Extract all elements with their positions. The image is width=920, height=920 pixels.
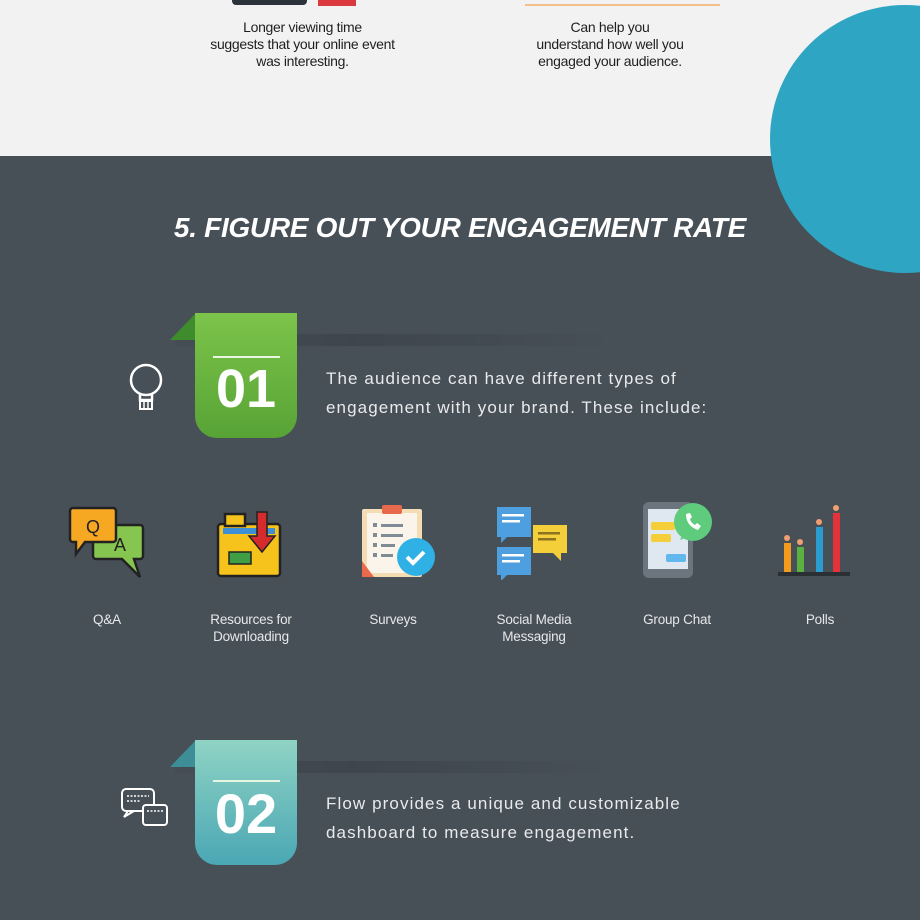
icon: download folder bbox=[216, 511, 282, 578]
caption: viewing time bbox=[210, 19, 395, 69]
caption: viewing time: Longer viewing time bbox=[243, 19, 362, 35]
header shadow band bbox=[175, 761, 615, 773]
label social bbox=[497, 612, 572, 644]
badge 01: 01 bbox=[216, 359, 276, 419]
fold bbox=[170, 313, 196, 340]
icon fragments top right bbox=[525, 0, 720, 6]
badge 01 bbox=[195, 313, 297, 438]
icon: chat windows bbox=[121, 788, 168, 826]
icon: light bulb bbox=[130, 364, 162, 410]
text 01: The audience can have different types of bbox=[326, 369, 677, 388]
text 02: Flow provides a unique and customizable bbox=[326, 794, 681, 813]
text 02 bbox=[326, 794, 681, 842]
icon fragments top left bbox=[232, 0, 307, 5]
top light section bbox=[0, 0, 920, 156]
icon: Q&A: Q bbox=[86, 517, 100, 537]
text 02: dashboard to measure engagement. bbox=[326, 823, 635, 842]
decorative teal circle bbox=[770, 5, 920, 273]
icon: survey bbox=[362, 505, 435, 577]
badge 02 bbox=[195, 740, 297, 865]
step 01 bbox=[130, 313, 707, 438]
caption: engagement bbox=[536, 19, 684, 69]
caption: viewing time: suggests that your online event bbox=[210, 36, 395, 52]
label group chat: Group Chat bbox=[643, 612, 711, 627]
section title: 5. FIGURE OUT YOUR ENGAGEMENT RATE bbox=[174, 212, 746, 243]
caption: engagement: Can help you bbox=[571, 19, 649, 35]
fold bbox=[170, 740, 196, 767]
caption: engagement: understand how well you bbox=[536, 36, 684, 52]
badge 02: 02 bbox=[215, 782, 277, 845]
icon: social messaging bbox=[497, 507, 567, 580]
icon: polls bbox=[778, 505, 850, 576]
label resources: Downloading bbox=[213, 629, 289, 644]
text 01 bbox=[326, 369, 707, 417]
icon: group chat phone bbox=[643, 502, 712, 578]
caption: engagement: engaged your audience. bbox=[538, 53, 682, 69]
icon: Q&A bbox=[68, 506, 144, 578]
caption: viewing time: was interesting. bbox=[256, 53, 349, 69]
label resources bbox=[210, 612, 292, 644]
label social: Social Media bbox=[497, 612, 571, 627]
label Q&A: Q&A bbox=[93, 612, 121, 627]
step 02 bbox=[121, 740, 681, 865]
header shadow band bbox=[175, 334, 615, 346]
label resources: Resources for bbox=[210, 612, 292, 627]
icon: Q&A: A bbox=[114, 535, 126, 555]
label social: Messaging bbox=[502, 629, 566, 644]
text 01: engagement with your brand. These include: bbox=[326, 398, 707, 417]
label polls: Polls bbox=[806, 612, 834, 627]
label surveys: Surveys bbox=[369, 612, 417, 627]
engagement types row bbox=[68, 502, 850, 644]
